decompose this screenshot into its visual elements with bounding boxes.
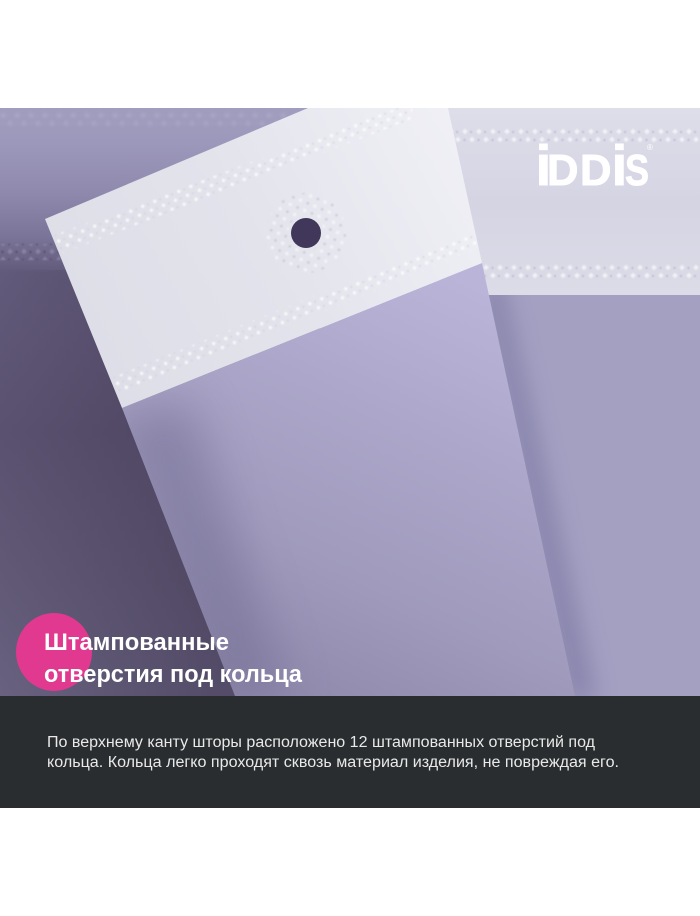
infographic canvas	[0, 108, 700, 808]
photo: shower curtain	[0, 108, 700, 700]
back curtain, right white band	[440, 108, 700, 296]
logo: IDDIS: i	[612, 134, 627, 198]
logo: IDDIS	[536, 134, 653, 198]
heading	[44, 629, 303, 688]
back curtain, left side	[0, 108, 320, 696]
heading: Штампованные	[44, 629, 229, 656]
logo: IDDIS: S	[625, 147, 649, 195]
back curtain, right lilac panel	[488, 295, 700, 696]
stitch row: upper	[52, 108, 414, 254]
stitch row: lower	[112, 231, 478, 396]
description text: По верхнему канту шторы расположено 12 штампованных отверстий под	[47, 734, 595, 751]
panel: description band	[0, 696, 700, 808]
accent: pink blob	[16, 613, 92, 691]
logo: IDDIS: i	[536, 134, 551, 198]
front flap, white hem	[45, 108, 482, 408]
front flap, lilac body	[110, 263, 575, 700]
description text: кольца. Кольца легко проходят сквозь материал изделия, не повреждая его.	[47, 754, 619, 771]
stamped ring around hole	[277, 204, 335, 262]
logo: IDDIS: D	[580, 147, 611, 195]
logo: IDDIS: ®	[647, 143, 653, 152]
logo: IDDIS: D	[547, 147, 578, 195]
heading: отверстия под кольца	[44, 661, 303, 688]
description text	[47, 734, 619, 771]
punched hole	[291, 218, 321, 248]
